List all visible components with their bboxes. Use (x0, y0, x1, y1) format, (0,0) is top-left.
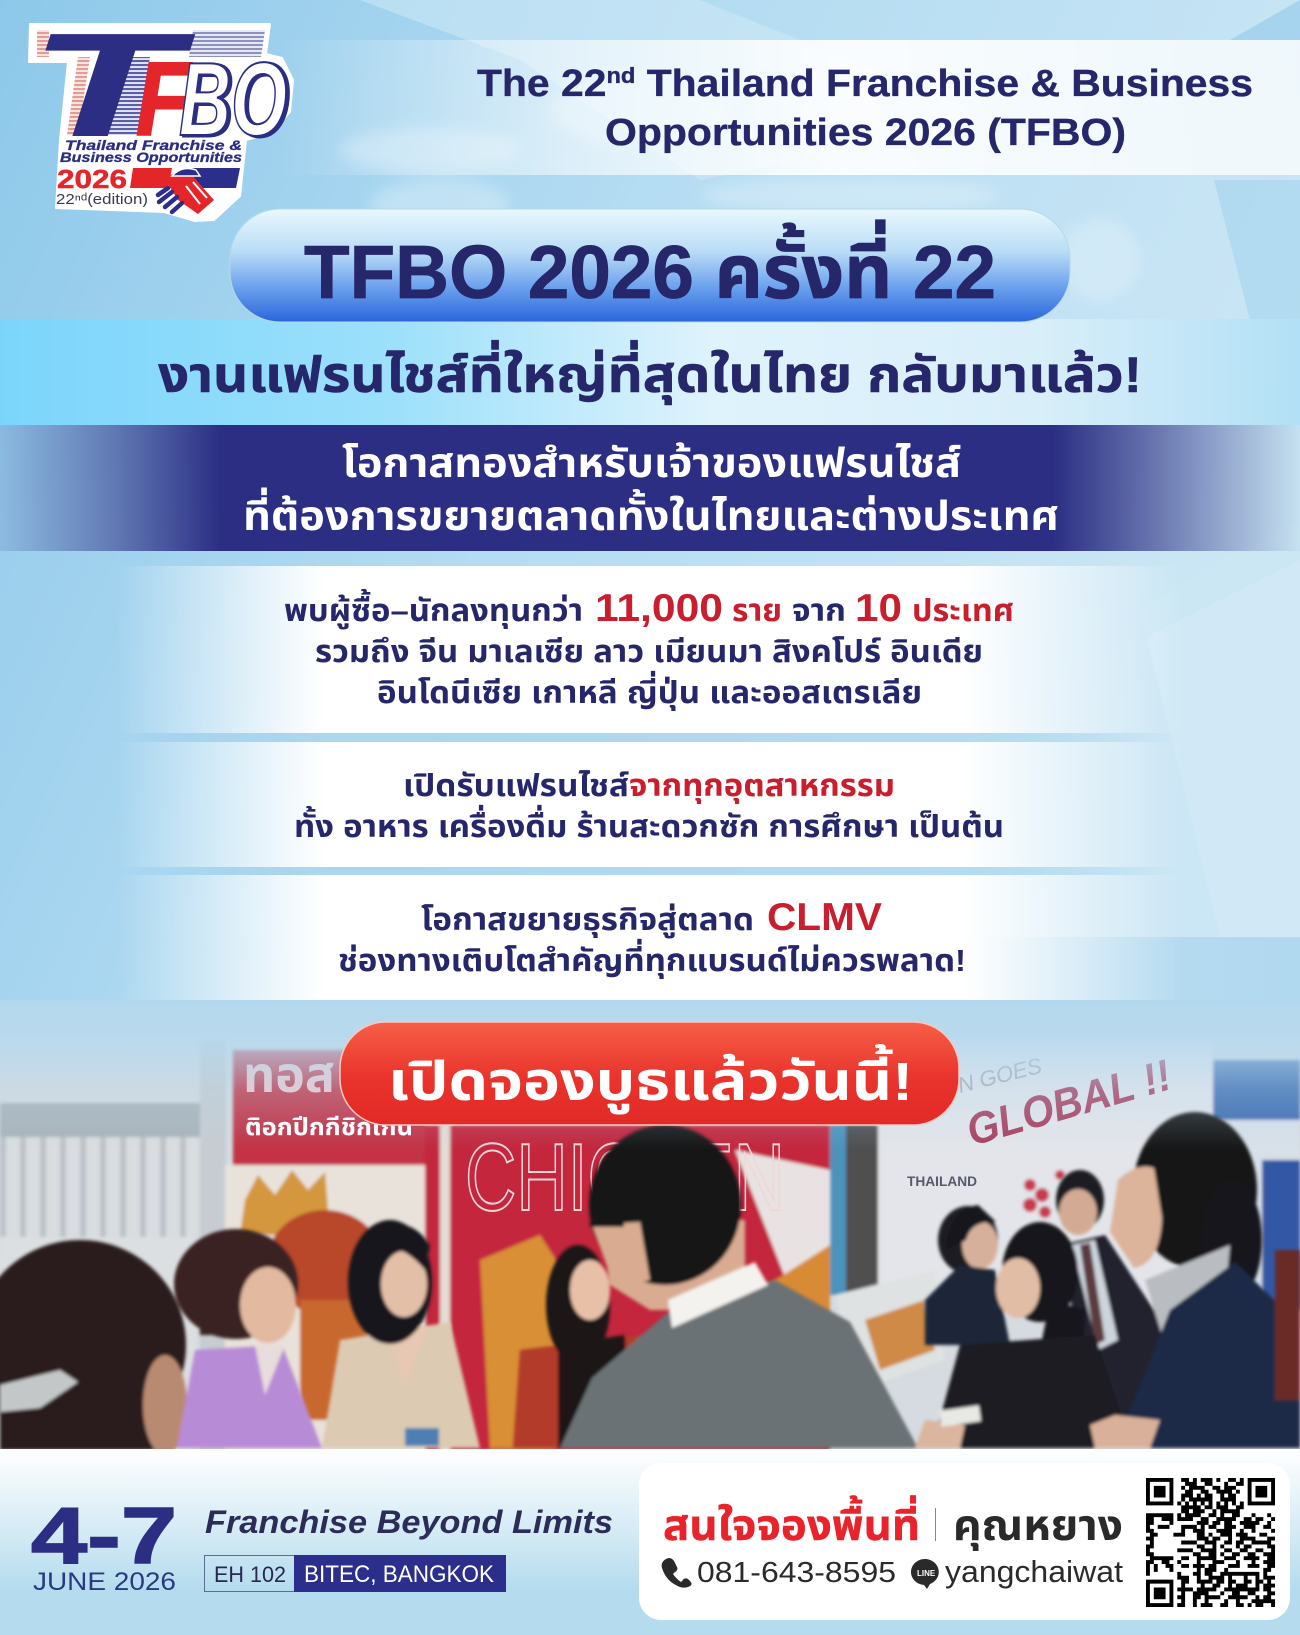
venue: BITEC, BANGKOK (304, 1561, 494, 1588)
benefit 1: buyers: จาก (792, 593, 846, 628)
contact card: 081-643-8595 (697, 1557, 896, 1589)
booth signage: N GOES (955, 1053, 1045, 1098)
logo: TFBO: Business Opportunities (60, 150, 243, 165)
header title: Opportunities 2026 (TFBO) (605, 112, 1126, 154)
date: JUNE 2026 (33, 1568, 176, 1596)
icon: LINE (911, 1559, 939, 1589)
cyan band (0, 319, 1300, 425)
venue (204, 1555, 506, 1592)
people (0, 1112, 1300, 1455)
world map backdrop (340, 74, 1140, 300)
background (0, 0, 1300, 1010)
footer (0, 1449, 1300, 1635)
header title (477, 63, 1253, 154)
logo: TFBO: Thailand Franchise & (65, 138, 242, 153)
benefit 1: buyers: ราย (732, 593, 782, 628)
benefit 1: buyers: ประเทศ (912, 593, 1014, 628)
venue: EH 102 (214, 1562, 286, 1587)
logo: TFBO (28, 3, 293, 221)
headline: งานแฟรนไชส์ที่ใหญ่ที่สุดในไทย กลับมาแล้ว! (158, 340, 1142, 405)
icon: LINE: LINE (917, 1569, 936, 1578)
benefit 1: buyers: 10 (855, 587, 902, 630)
benefit 2: industries (294, 768, 1004, 844)
logo: TFBO: BO (182, 43, 290, 159)
benefit 3: CLMV (338, 896, 966, 979)
red button: เปิดจองบูธแล้ววันนี้! (388, 1044, 913, 1114)
contact card (639, 1463, 1290, 1620)
date (31, 1491, 177, 1596)
contact card: สนใจจองพื้นที่ (663, 1495, 920, 1550)
benefit 1: buyers: 11,000 (595, 587, 723, 630)
photo: booth with people (0, 1000, 1300, 1455)
pill heading (230, 209, 1070, 322)
booth signage (246, 1058, 1168, 1212)
date: 4-7 (31, 1491, 177, 1580)
contact card: yangchaiwat (945, 1554, 1123, 1589)
QR code (1146, 1480, 1275, 1605)
navy band: ที่ต้องการขยายตลาดทั้งในไทยและต่างประเทศ (243, 487, 1059, 539)
booth signage: GLOBAL !! (961, 1051, 1177, 1156)
benefit 3: CLMV: ช่องทางเติบโตสำคัญที่ทุกแบรนด์ไม่ควรพลาด! (338, 938, 966, 979)
red button (340, 1022, 959, 1125)
logo: TFBO: 22ⁿᵈ(edition) (56, 191, 148, 208)
benefit 1: buyers: พบผู้ซื้อ–นักลงทุนกว่า (284, 588, 583, 629)
header band (280, 40, 1300, 175)
panel: benefits (0, 566, 1300, 1000)
tagline: Franchise Beyond Limits (205, 1504, 613, 1540)
navy band: โอกาสทองสำหรับเจ้าของแฟรนไชส์ (342, 440, 961, 486)
booth signage: ทอส (243, 1047, 335, 1103)
benefit 2: industries: จากทุกอุตสาหกรรม (629, 768, 895, 804)
header title: The 22 (477, 63, 597, 105)
benefit 3: CLMV: CLMV (767, 896, 882, 939)
benefit 1: buyers: รวมถึง จีน มาเลเซีย ลาว เมียนมา สิงคโปร์ อินเดีย (315, 634, 983, 669)
icon: phone (662, 1558, 692, 1588)
booth signage: THAILAND (907, 1173, 977, 1189)
benefit 2: industries: เปิดรับแฟรนไชส์ (403, 768, 629, 803)
header title: Thailand Franchise & Business (635, 63, 1253, 105)
logo: TFBO: 2026 (57, 164, 127, 194)
logo: TFBO: T (28, 3, 196, 168)
booth signage: ติอกปีกกีชิกเกน (245, 1114, 413, 1141)
booth signage: CHICKEN (465, 1124, 785, 1231)
header title: nd (606, 63, 635, 88)
benefit 3: CLMV: โอกาสขยายธุรกิจสู่ตลาด (421, 902, 754, 938)
logo: TFBO: F (136, 42, 192, 158)
icon: handshake (158, 168, 214, 214)
navy band (0, 425, 1300, 551)
benefit 1: buyers: อินโดนีเซีย เกาหลี ญี่ปุ่น และออสเตรเลีย (377, 670, 922, 711)
pill heading: TFBO 2026 ครั้งที่ 22 (304, 220, 996, 314)
benefit 2: industries: ทั้ง อาหาร เครื่องดื่ม ร้านสะดวกซัก การศึกษา เป็นต้น (294, 804, 1004, 844)
benefit 1: buyers (284, 587, 1014, 711)
logo: TFBO: BO (179, 42, 287, 158)
contact card: คุณหยาง (953, 1502, 1123, 1551)
